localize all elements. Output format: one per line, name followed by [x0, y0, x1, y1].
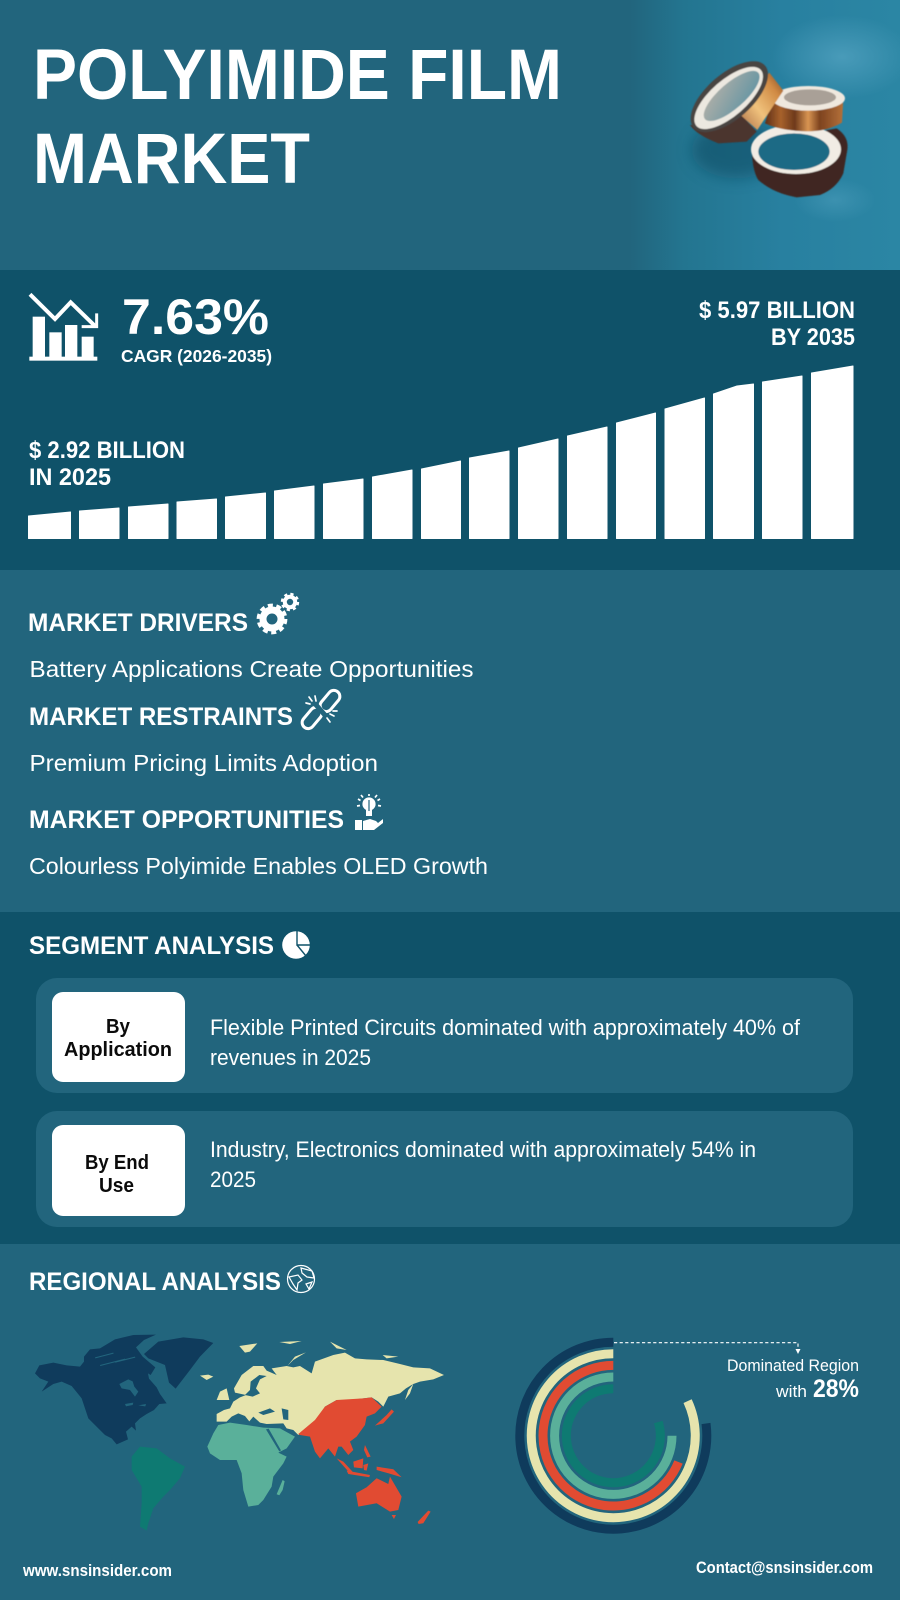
heading: market drivers: MARKET DRIVERS [28, 609, 248, 637]
ring: europe and northern asia [531, 1354, 695, 1518]
text: driver: Battery Applications Create Opportunities [30, 656, 474, 682]
card: by application [36, 978, 853, 1093]
regional background [0, 1244, 900, 1600]
callout: dominated region leader line [614, 1343, 800, 1354]
title [33, 36, 562, 199]
CAGR value: 7.63% [122, 289, 269, 345]
market size background [0, 270, 900, 570]
icon: chart with trend arrow [29, 294, 97, 361]
label box: by end use: By End [85, 1152, 149, 1174]
icon: pie chart [282, 931, 311, 959]
lower light patch of photo backdrop [795, 178, 875, 222]
text: restraint: Premium Pricing Limits Adoption [30, 750, 378, 776]
label box: by application: By [106, 1016, 131, 1038]
photo: polyimide tape rolls [679, 49, 848, 197]
panel: market size [0, 270, 900, 570]
icon: globe [288, 1266, 314, 1292]
region: asia pacific [298, 1397, 431, 1524]
callout: dominated region: Dominated Region [727, 1356, 859, 1375]
2025 value label: IN 2025 [29, 464, 111, 491]
panel: header [0, 0, 900, 270]
text: application insight: Flexible Printed Circuits dominated with approximately 40% of [210, 1015, 801, 1040]
label box: by end use [52, 1125, 185, 1216]
title: MARKET [33, 120, 310, 199]
label box: by application: Application [64, 1039, 172, 1061]
icon: broken chain [300, 688, 342, 731]
card: by end use [36, 1111, 853, 1227]
2025 value label [29, 437, 185, 491]
heading: market restraints: MARKET RESTRAINTS [29, 703, 293, 731]
CAGR label: CAGR (2026-2035) [121, 346, 272, 366]
2025 value label: $ 2.92 BILLION [29, 437, 185, 464]
icon: hand holding light bulb [355, 794, 383, 830]
ring: asia pacific [543, 1365, 678, 1506]
heading: segment analysis: SEGMENT ANALYSIS [29, 932, 274, 960]
world map [35, 1335, 444, 1531]
text: application insight: revenues in 2025 [210, 1045, 371, 1070]
region: europe and northern asia [200, 1341, 444, 1435]
text: end use insight [210, 1137, 756, 1192]
segment background [0, 912, 900, 1244]
footer: contact: Contact@snsinsider.com [696, 1559, 873, 1577]
title: POLYIMIDE FILM [33, 36, 562, 115]
icon: gears [258, 594, 298, 633]
panel: market dynamics [0, 570, 900, 912]
text: end use insight: Industry, Electronics dominated with approximately 54% in [210, 1137, 756, 1162]
chart: concentric region rings [520, 1342, 707, 1529]
header background with photo fade [0, 0, 900, 270]
region: south america [132, 1447, 185, 1531]
dynamics background [0, 570, 900, 912]
bar chart: market growth [28, 366, 853, 538]
text: application insight [210, 1015, 801, 1070]
ring: north america [520, 1342, 707, 1529]
callout: dominated region: with [775, 1382, 807, 1401]
text: opportunity: Colourless Polyimide Enables OLED Growth [29, 853, 488, 879]
heading: market opportunities: MARKET OPPORTUNITIES [29, 806, 344, 834]
light patch of photo backdrop [772, 15, 900, 99]
2035 value label: BY 2035 [771, 324, 855, 351]
text: end use insight: 2025 [210, 1167, 256, 1192]
region: north america [35, 1335, 213, 1444]
footer: website: www.snsinsider.com [22, 1562, 172, 1580]
2035 value label [699, 297, 855, 351]
heading: regional analysis: REGIONAL ANALYSIS [29, 1268, 281, 1296]
label box: by application [52, 992, 185, 1082]
panel: regional analysis [0, 1244, 900, 1600]
ring: south america [566, 1389, 660, 1483]
region: middle east and africa [207, 1423, 295, 1507]
callout: dominated region: 28% [813, 1375, 859, 1403]
label box: by end use: Use [99, 1175, 134, 1197]
2035 value label: $ 5.97 BILLION [699, 297, 855, 324]
callout: dominated region [727, 1356, 859, 1403]
ring: middle east and africa [555, 1377, 672, 1494]
panel: segment analysis [0, 912, 900, 1244]
